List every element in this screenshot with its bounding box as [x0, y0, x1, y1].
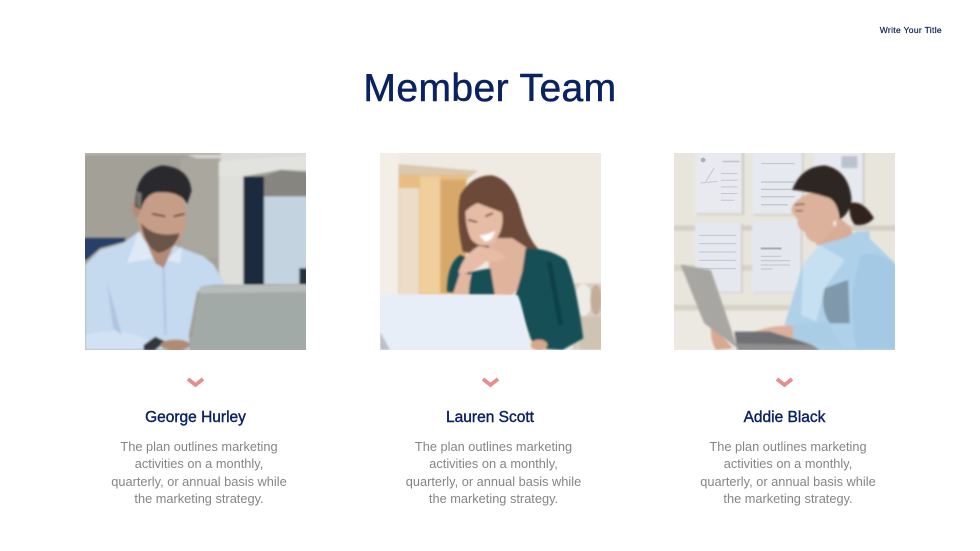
description — [111, 439, 287, 506]
description: the marketing strategy. — [134, 491, 264, 506]
laptop — [373, 294, 529, 352]
description — [406, 439, 581, 506]
laptop — [681, 265, 820, 351]
description: activities on a monthly, — [724, 456, 852, 471]
description: quarterly, or annual basis while — [700, 474, 876, 489]
icon: chevron — [776, 378, 794, 388]
photo: woman in blue blouse at laptop — [674, 153, 895, 350]
icon: chevron — [482, 378, 500, 388]
description: The plan outlines marketing — [709, 439, 867, 454]
header label: Write Your Title — [880, 25, 942, 35]
description — [700, 439, 876, 506]
name: Lauren Scott — [446, 409, 534, 426]
panel: Lauren Scott — [380, 153, 601, 506]
description: the marketing strategy. — [429, 491, 558, 506]
title: Member Team — [363, 67, 617, 110]
person — [446, 175, 583, 350]
wall paper details — [699, 158, 795, 270]
panel: George Hurley — [85, 153, 306, 506]
description: The plan outlines marketing — [415, 439, 572, 454]
person — [711, 165, 897, 352]
photo: man at laptop — [85, 153, 306, 350]
name: George Hurley — [145, 409, 246, 426]
description: activities on a monthly, — [429, 456, 558, 471]
panel: Addie Black — [674, 153, 895, 506]
name: Addie Black — [744, 409, 825, 426]
description: The plan outlines marketing — [120, 439, 278, 454]
description: quarterly, or annual basis while — [406, 474, 581, 489]
description: the marketing strategy. — [723, 491, 853, 506]
description: quarterly, or annual basis while — [111, 474, 287, 489]
description: activities on a monthly, — [135, 456, 263, 471]
icon: chevron — [186, 378, 204, 388]
laptop — [190, 284, 308, 352]
person — [85, 165, 226, 350]
photo: woman smiling at laptop — [380, 153, 601, 350]
